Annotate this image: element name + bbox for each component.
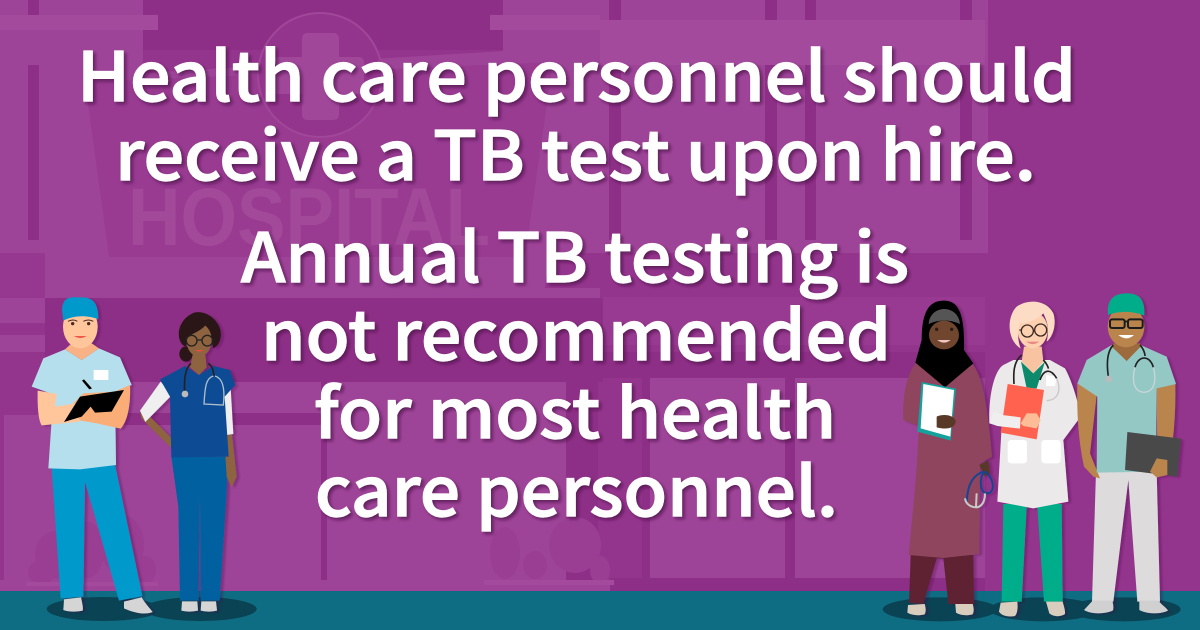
heading: annual testing: not recommended <box>261 281 891 380</box>
figure: doctor in white coat with red folder <box>989 302 1097 621</box>
heading: hire testing <box>77 22 1076 200</box>
heading: annual testing: care personnel. <box>315 437 838 536</box>
figure: woman in hijab with clipboard and stethoscope <box>883 301 997 621</box>
figure: nurse in light blue scrubs with clipboard <box>32 297 257 621</box>
planter center <box>484 517 614 585</box>
planter left <box>26 515 158 586</box>
heading: annual testing <box>241 203 909 536</box>
heading: annual testing: Annual TB testing is <box>241 203 909 302</box>
figures left <box>32 297 257 621</box>
heading: hire testing: receive a TB test upon hire. <box>115 101 1036 200</box>
sign: cross medallion <box>258 13 382 137</box>
sign: hospital lettering: HOSPITAL <box>128 172 490 263</box>
figure: nurse in navy scrubs with stethoscope <box>140 312 237 612</box>
heading: hire testing: Health care personnel should <box>77 22 1076 121</box>
figure: surgeon in teal scrubs with dark folder <box>1067 293 1181 621</box>
heading: annual testing: for most health <box>314 359 836 458</box>
figures right <box>883 293 1181 621</box>
floor <box>0 591 1200 630</box>
